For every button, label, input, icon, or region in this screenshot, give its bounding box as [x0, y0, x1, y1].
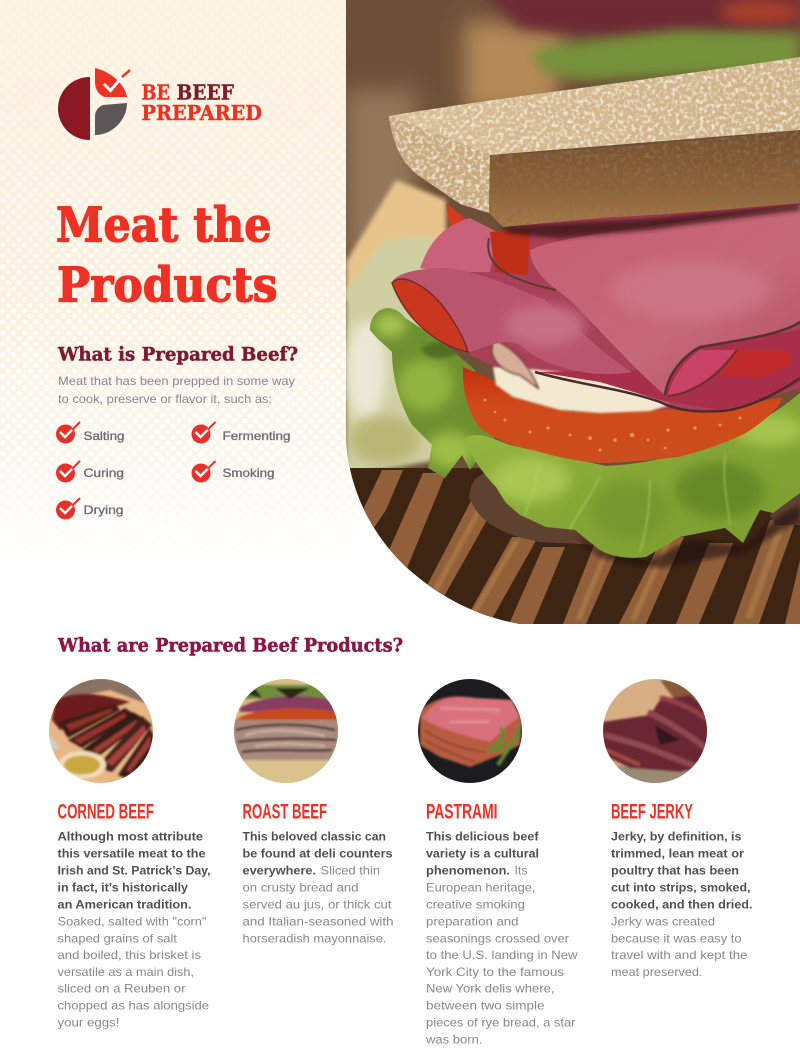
- description: chopped as has alongside: [58, 998, 209, 1012]
- heading: products: What are Prepared Beef Products?: [57, 634, 403, 656]
- tomato peek and upper left slice: [420, 203, 556, 290]
- photo: sandwich: [346, 0, 800, 624]
- logo: [58, 68, 262, 140]
- description: Soaked, salted with "corn": [58, 914, 206, 928]
- heading: ROAST BEEF: [242, 800, 327, 824]
- item: curing: [56, 461, 124, 482]
- item: salting: [56, 422, 124, 444]
- description: and boiled, this brisket is: [58, 948, 201, 962]
- item: smoking: Smoking: [222, 466, 274, 480]
- description: an American tradition.: [58, 898, 192, 912]
- title: [56, 198, 278, 314]
- description: shaped grains of salt: [58, 932, 178, 946]
- column: beef jerky: [611, 800, 752, 979]
- column: corned beef: [58, 800, 210, 1030]
- description: [425, 830, 578, 1046]
- description: pieces of rye bread, a star: [426, 1016, 576, 1030]
- column: pastrami: [425, 800, 578, 1046]
- meat underlay: [468, 203, 800, 410]
- tomato slice: [463, 367, 783, 463]
- lower left slice: [392, 268, 632, 374]
- photo: beef jerky: [603, 679, 707, 783]
- ham fold: [492, 340, 538, 388]
- description: This beloved classic can: [242, 830, 386, 844]
- wood slats: [346, 468, 800, 624]
- heading: what is prepared beef: What is Prepared Beef?: [57, 344, 298, 366]
- description: poultry that has been: [611, 864, 739, 878]
- description: Jerky was created: [611, 914, 715, 928]
- description: Sliced thin: [320, 864, 380, 878]
- logo wordmark: BEEF: [176, 80, 234, 104]
- cheese: [493, 367, 670, 413]
- checklist: [56, 422, 290, 520]
- shadow under lettuce: [575, 505, 800, 568]
- description: variety is a cultural: [426, 846, 539, 860]
- description: cooked, and then dried.: [611, 898, 752, 912]
- description: in fact, it’s historically: [58, 880, 188, 894]
- description: your eggs!: [58, 1016, 120, 1030]
- bottom bread: [469, 474, 800, 545]
- description: because it was easy to: [611, 932, 742, 946]
- description: Although most attribute: [58, 830, 203, 844]
- item: drying: [56, 498, 124, 520]
- description: [611, 830, 752, 979]
- column: roast beef: [242, 800, 394, 946]
- description: creative smoking: [426, 898, 525, 912]
- description: preparation and: [426, 914, 518, 928]
- item: drying: Drying: [84, 503, 124, 517]
- description: horseradish mayonnaise.: [242, 932, 386, 946]
- description: served au jus, or thick cut: [242, 898, 392, 912]
- description: was born.: [425, 1032, 482, 1046]
- title: Meat the: [56, 198, 272, 254]
- logo wordmark: BE: [142, 80, 170, 104]
- intro text: [58, 374, 295, 406]
- top bread slice: [389, 57, 800, 227]
- description: this versatile meat to the: [58, 846, 206, 860]
- shadow under bread: [500, 204, 800, 238]
- description: to the U.S. landing in New: [426, 948, 578, 962]
- item: fermenting: Fermenting: [222, 429, 290, 443]
- heading: CORNED BEEF: [58, 800, 154, 824]
- logo wordmark: PREPARED: [142, 101, 262, 125]
- description: [58, 830, 210, 1030]
- item: salting: Salting: [84, 429, 124, 443]
- logo mark: [58, 68, 130, 140]
- description: be found at deli counters: [242, 846, 393, 860]
- lettuce main: [465, 393, 800, 558]
- photo: corned beef: [49, 679, 153, 783]
- description: seasonings crossed over: [426, 932, 569, 946]
- heading: BEEF JERKY: [611, 800, 693, 824]
- blurred background: [346, 0, 800, 624]
- description: between two simple: [426, 998, 545, 1012]
- title: Products: [57, 258, 278, 314]
- description: and Italian-seasoned with: [242, 914, 394, 928]
- photo: roast beef: [234, 679, 338, 783]
- description: Its: [514, 864, 528, 878]
- heading: PASTRAMI: [426, 800, 498, 824]
- panel: dotted cream background: [0, 0, 360, 560]
- photo: pastrami: [418, 679, 522, 783]
- description: trimmed, lean meat or: [611, 846, 744, 860]
- description: This delicious beef: [426, 830, 540, 844]
- lower meat strip: [535, 330, 800, 411]
- description: travel with and kept the: [611, 948, 748, 962]
- intro text: to cook, preserve or flavor it, such as:: [58, 392, 272, 406]
- description: phenomenon.: [426, 864, 510, 878]
- intro text: Meat that has been prepped in some way: [58, 374, 295, 388]
- description: Jerky, by definition, is: [611, 830, 742, 844]
- logo wordmark: [142, 80, 262, 125]
- description: European heritage,: [426, 880, 536, 894]
- item: curing: Curing: [84, 466, 124, 480]
- description: on crusty bread and: [242, 880, 358, 894]
- description: York City to the famous: [426, 965, 564, 979]
- main pink meat slice: [530, 205, 800, 396]
- item: fermenting: [192, 422, 290, 444]
- soft cheese and pickle behind: [346, 180, 446, 475]
- description: [242, 830, 394, 946]
- description: New York delis where,: [426, 982, 554, 996]
- description: versatile as a main dish,: [58, 965, 194, 979]
- description: meat preserved.: [611, 965, 702, 979]
- description: everywhere.: [242, 864, 316, 878]
- item: smoking: [192, 461, 274, 482]
- lettuce left: [370, 308, 495, 478]
- description: sliced on a Reuben or: [58, 982, 186, 996]
- description: Irish and St. Patrick’s Day,: [58, 864, 210, 878]
- description: cut into strips, smoked,: [611, 880, 750, 894]
